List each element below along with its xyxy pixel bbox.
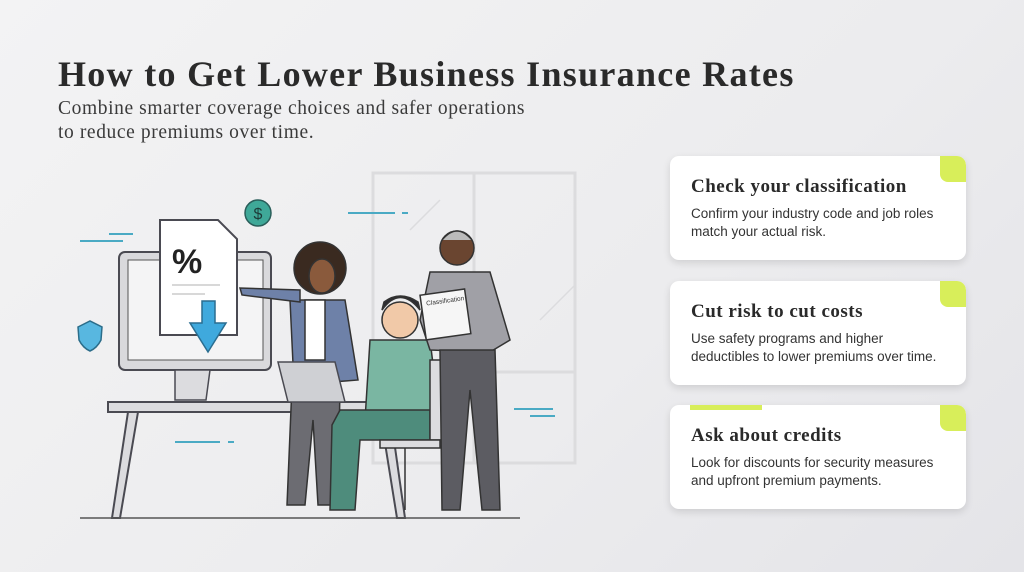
icon: dollar coin: $ <box>254 206 263 223</box>
desk <box>108 402 408 518</box>
decorative dashes <box>80 213 555 442</box>
icon: dollar coin <box>245 200 271 226</box>
document with percent: % <box>172 243 202 281</box>
man seated <box>330 296 450 510</box>
window frame <box>373 173 575 463</box>
card: credits <box>670 405 966 509</box>
older man with clipboard <box>420 231 510 510</box>
body text: and upfront premium payments. <box>691 473 882 488</box>
body text <box>691 455 933 488</box>
body text: Use safety programs and higher <box>691 331 883 346</box>
card: check classification <box>670 156 966 260</box>
subtitle <box>58 98 525 143</box>
card: cut risk <box>670 281 966 385</box>
body text <box>691 331 936 364</box>
body text: deductibles to lower premiums over time. <box>691 349 936 364</box>
subtitle: Combine smarter coverage choices and safer operations <box>58 98 525 119</box>
body text: Confirm your industry code and job roles <box>691 206 933 221</box>
floor line <box>80 517 520 519</box>
laptop <box>278 362 345 402</box>
illustration: office team <box>77 172 576 519</box>
body text: match your actual risk. <box>691 224 826 239</box>
heading: Check your classification <box>691 176 907 197</box>
icon: shield <box>78 321 102 351</box>
title: How to Get Lower Business Insurance Rates <box>58 54 795 94</box>
document with percent <box>160 220 237 352</box>
heading: Ask about credits <box>691 425 842 446</box>
body text: Look for discounts for security measures <box>691 455 933 470</box>
body text <box>691 206 933 239</box>
monitor <box>119 252 271 400</box>
subtitle: to reduce premiums over time. <box>58 122 314 143</box>
heading: Cut risk to cut costs <box>691 301 863 322</box>
woman <box>240 242 358 505</box>
older man with clipboard: Classification <box>426 295 465 307</box>
